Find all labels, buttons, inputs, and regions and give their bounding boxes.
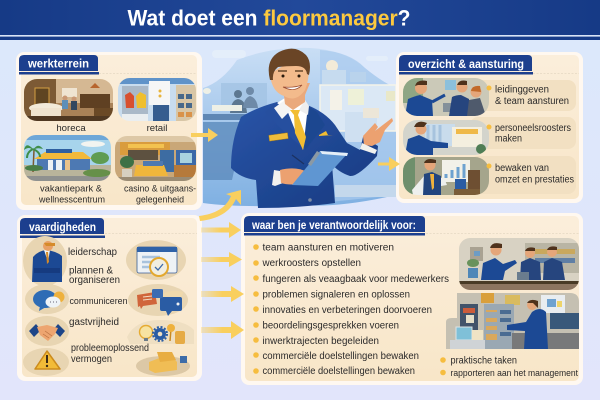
label: plannen en organiseren: organiseren bbox=[69, 275, 120, 286]
row: personeelsroosters bbox=[403, 117, 576, 155]
label: probleemoplossend vermogen: vermogen bbox=[71, 354, 112, 365]
icon: handshake bbox=[25, 316, 69, 346]
arrow: to responsibilities 4 bbox=[201, 321, 244, 339]
row: personeelsroosters: maken bbox=[495, 134, 522, 144]
man in suit bbox=[231, 49, 393, 208]
list: praktische taken bbox=[440, 356, 578, 379]
arrow: to responsibilities 3 bbox=[201, 286, 244, 302]
list: verantwoordelijkheden: problemen signaleren en oplossen bbox=[262, 290, 410, 300]
image: casino bbox=[115, 136, 196, 181]
heading: verantwoordelijk: waar ben je verantwoordelijk voor: bbox=[251, 218, 416, 232]
icon: files bbox=[136, 352, 190, 376]
image: store counter bbox=[446, 293, 579, 349]
list: verantwoordelijkheden: commerciële doelstellingen bewaken bbox=[262, 366, 415, 377]
label: communiceren: communiceren bbox=[70, 296, 128, 307]
row: bewaken bbox=[403, 156, 576, 195]
label: retail: retail bbox=[147, 123, 167, 134]
image: horeca bbox=[24, 79, 113, 121]
row: leidinggeven: & team aansturen bbox=[495, 96, 569, 107]
label: probleemoplossend vermogen bbox=[71, 343, 149, 365]
row: leidinggeven bbox=[403, 78, 576, 116]
list: praktische taken: rapporteren aan het management bbox=[450, 368, 578, 379]
label: plannen en organiseren: plannen & bbox=[69, 266, 113, 276]
label: vakantiepark: wellnesscentrum bbox=[38, 194, 105, 206]
panel: overzicht en aansturing bbox=[396, 52, 583, 203]
row: bewaken: omzet en prestaties bbox=[495, 174, 574, 186]
list: praktische taken: praktische taken bbox=[450, 356, 517, 366]
heading: werkterrein: werkterrein bbox=[27, 56, 89, 70]
heading: vaardigheden: vaardigheden bbox=[29, 220, 96, 234]
title: Wat doet een floormanager? bbox=[128, 6, 410, 30]
list: verantwoordelijkheden bbox=[253, 242, 449, 377]
heading: vaardigheden bbox=[20, 218, 105, 238]
list: verantwoordelijkheden: beoordelingsgesprekken voeren bbox=[262, 320, 399, 332]
arrow: vaardigheden to manager bbox=[199, 190, 241, 221]
heading: overzicht bbox=[399, 55, 533, 74]
list: verantwoordelijkheden: werkroosters opstellen bbox=[262, 258, 361, 269]
central illustration: floormanager bbox=[203, 48, 396, 208]
label: vakantiepark bbox=[38, 184, 105, 206]
label: gastvrijheid: gastvrijheid bbox=[69, 317, 119, 328]
image: vakantiepark bbox=[24, 135, 111, 181]
heading: werkterrein bbox=[19, 55, 99, 74]
list: verantwoordelijkheden: innovaties en verbeteringen doorvoeren bbox=[262, 305, 432, 316]
label: casino: casino & uitgaans- bbox=[124, 184, 196, 194]
row: leidinggeven: leidinggeven bbox=[495, 84, 549, 96]
icon: calendar bbox=[126, 240, 186, 280]
icon: warning bbox=[23, 348, 69, 376]
list: verantwoordelijkheden: team aansturen en motiveren bbox=[262, 242, 394, 254]
list: verantwoordelijkheden: commerciële doelstellingen bewaken bbox=[262, 351, 419, 362]
image: retail bbox=[118, 78, 196, 121]
arrow: manager to overzicht bbox=[378, 157, 400, 171]
header band bbox=[0, 0, 600, 40]
label: probleemoplossend vermogen: probleemoplossend bbox=[71, 343, 149, 354]
icon: chat cards bbox=[128, 284, 188, 316]
heading: overzicht: overzicht & aansturing bbox=[408, 57, 524, 71]
label: casino: gelegenheid bbox=[136, 194, 184, 206]
row: personeelsroosters: personeelsroosters bbox=[495, 123, 571, 134]
icon: leider bbox=[23, 236, 67, 286]
background scene bbox=[203, 48, 396, 206]
arrow: to responsibilities 1 bbox=[201, 222, 241, 238]
label: leiderschap: leiderschap bbox=[68, 247, 117, 258]
panel: werkterrein bbox=[16, 52, 202, 210]
label: vakantiepark: vakantiepark & bbox=[40, 184, 103, 194]
label: plannen en organiseren bbox=[69, 266, 120, 286]
list: verantwoordelijkheden: fungeren als veaagbaak voor medewerkers bbox=[262, 274, 449, 285]
icon: ideas bbox=[127, 320, 194, 344]
label: horeca: horeca bbox=[56, 123, 86, 134]
panel: waar ben je verantwoordelijk voor bbox=[241, 213, 583, 385]
icon: chat bbox=[25, 284, 69, 314]
arrow: werkterrein to manager bbox=[191, 128, 218, 142]
list: verantwoordelijkheden: inwerktrajecten begeleiden bbox=[262, 336, 379, 347]
arrow: to responsibilities 2 bbox=[201, 252, 242, 267]
row: bewaken: bewaken van bbox=[495, 163, 549, 174]
label: casino bbox=[124, 184, 196, 206]
heading: verantwoordelijk bbox=[244, 216, 425, 236]
image: team meeting bbox=[459, 238, 579, 290]
panel: vaardigheden bbox=[17, 215, 202, 381]
